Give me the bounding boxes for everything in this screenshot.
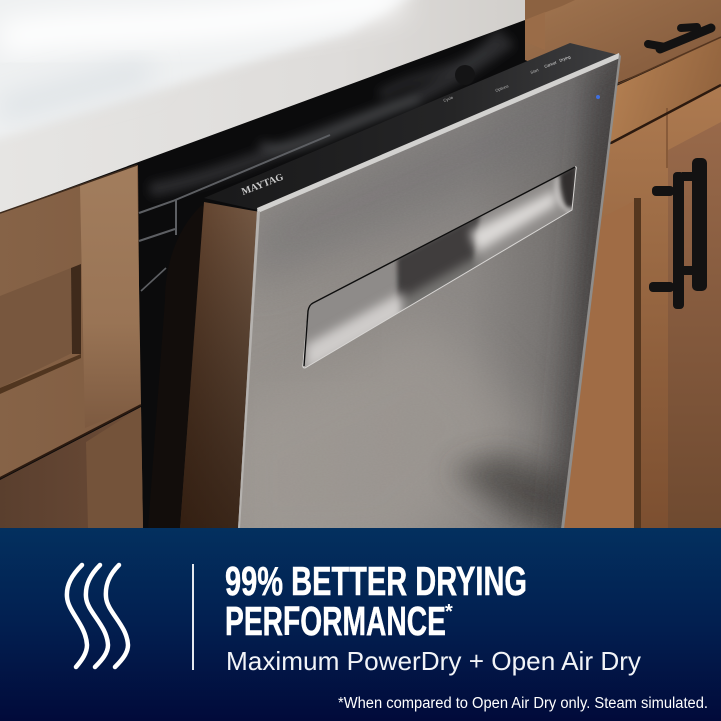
banner bbox=[0, 528, 721, 721]
subheading: Maximum PowerDry + Open Air Dry bbox=[226, 646, 641, 676]
headline: 99% BETTER DRYING bbox=[225, 558, 527, 604]
curved door edge bbox=[148, 205, 205, 529]
lower door panel bbox=[562, 200, 636, 529]
headline: * bbox=[445, 601, 453, 623]
lower drawer bbox=[0, 407, 143, 529]
logo: MAYTAG bbox=[240, 172, 285, 198]
control labels: Drying bbox=[559, 54, 571, 63]
recessed panel bbox=[0, 268, 72, 388]
icon: steam waves bbox=[67, 565, 128, 667]
dishwasher door bbox=[180, 43, 621, 528]
right cabinets bbox=[525, 0, 721, 529]
control labels: Cycle bbox=[443, 94, 454, 103]
footnote: *When compared to Open Air Dry only. Steam simulated. bbox=[338, 695, 708, 712]
right end shade bbox=[558, 163, 577, 210]
control labels bbox=[443, 54, 571, 103]
headline: PERFORMANCE bbox=[225, 598, 446, 644]
top drawer handle bbox=[648, 27, 711, 49]
left highlight bbox=[306, 292, 404, 372]
stile bbox=[80, 165, 141, 428]
indicator light bbox=[596, 95, 600, 99]
dishwasher cavity bbox=[130, 15, 530, 529]
headline bbox=[225, 558, 527, 644]
recessed handle bbox=[302, 166, 577, 368]
highlight strip bbox=[257, 53, 620, 213]
door handle bbox=[649, 158, 707, 309]
left cabinets bbox=[0, 165, 143, 529]
door side face bbox=[180, 202, 260, 529]
steel front bbox=[238, 53, 621, 528]
divider bbox=[192, 564, 194, 670]
countertop bbox=[0, 0, 562, 213]
dark middle scoop bbox=[397, 214, 480, 320]
steam bbox=[150, 30, 510, 190]
dish rack bbox=[139, 135, 330, 291]
control labels: Start bbox=[530, 67, 540, 75]
control labels: Options bbox=[495, 83, 509, 93]
control labels: Cancel bbox=[544, 60, 557, 69]
photo: kitchen scene with dishwasher bbox=[0, 0, 721, 560]
control panel top bbox=[204, 43, 619, 210]
right highlight bbox=[470, 190, 556, 252]
